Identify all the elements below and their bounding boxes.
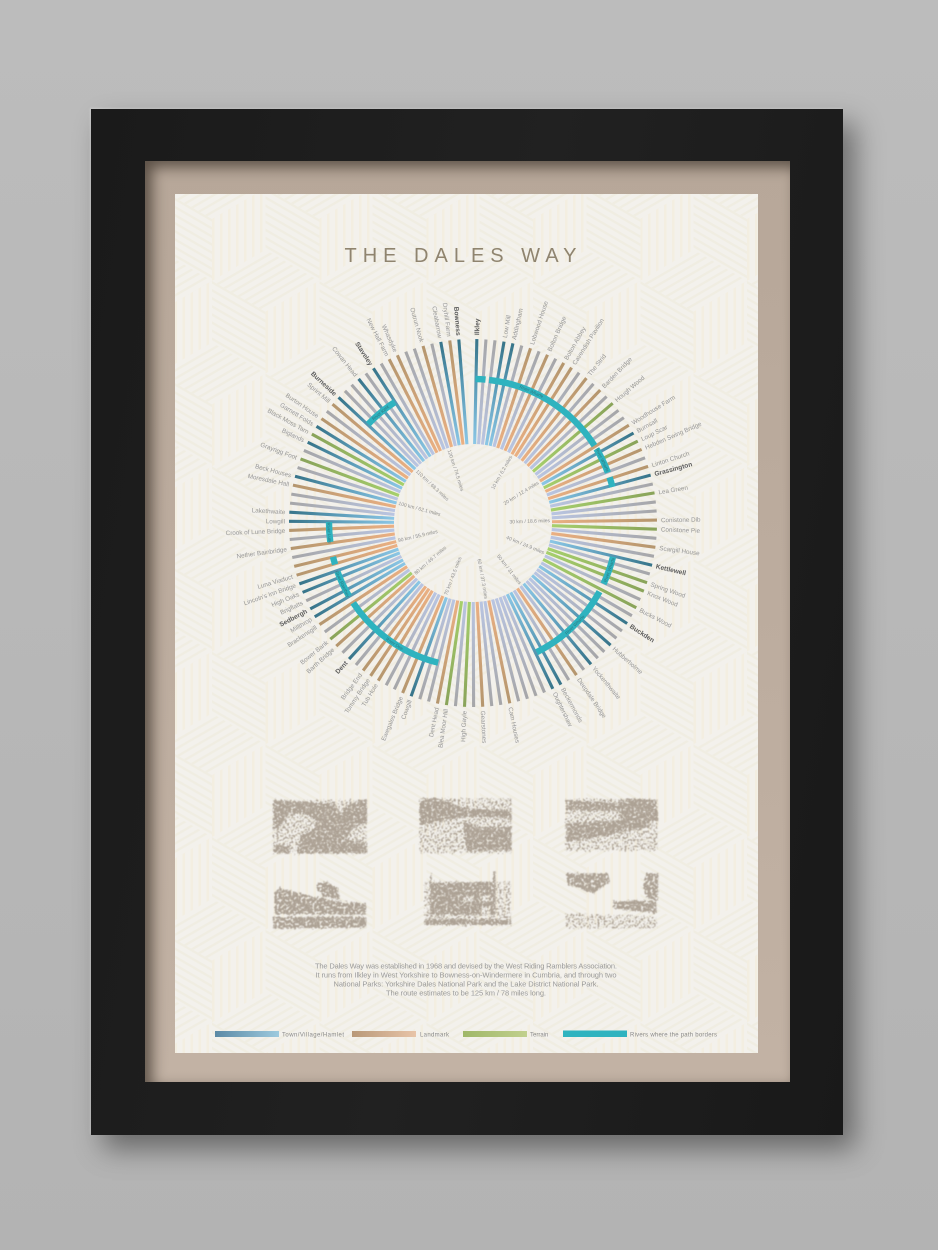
stop labels around the outside of the ring: Bridge End [340,672,364,701]
stop labels around the outside of the ring: Cleabarrow [430,306,443,339]
stop labels around the outside of the ring: Lea Green [658,485,689,496]
stop labels around the outside of the ring: Hebden Swing Bridge [644,421,703,452]
stop labels around the outside of the ring: Black Moss Tarn [266,407,310,436]
stop labels around the outside of the ring: Lincoln's Inn Bridge [243,582,297,607]
stop labels around the outside of the ring: Ilkley [474,318,481,335]
stop labels around the outside of the ring: New Hall Farm [365,317,390,358]
poster [175,194,758,1053]
river names: River Wharfe [603,556,616,583]
stop labels around the outside of the ring: High Gayle [460,710,469,742]
stop labels around the outside of the ring: Grassington [654,461,693,478]
stop labels around the outside of the ring: Low Mill [502,315,513,338]
stop labels around the outside of the ring: Cowgill [400,699,414,721]
stop labels around the outside of the ring: Bucks Wood [638,607,673,630]
stop labels around the outside of the ring: Outrun Nook [408,307,425,344]
stop labels around the outside of the ring: Burneside [309,371,338,398]
stop labels around the outside of the ring: The Strid [587,353,608,378]
stop labels around the outside of the ring: Sprint Mill [306,382,331,405]
engraved photographs [273,798,658,928]
river names: River Rawthey [334,570,351,599]
stop labels around the outside of the ring: Scargill House [659,545,700,557]
distance markers inside the ring: 20 km / 12.4 miles [503,480,541,507]
stop labels around the outside of the ring: Garnett Folds [278,402,315,428]
river names: River Wharfe [594,447,610,473]
stop labels around the outside of the ring: Bower Bank [299,639,331,666]
stop labels around the outside of the ring: Crook of Lune Bridge [226,528,286,537]
stop labels around the outside of the ring [226,300,703,748]
stop labels around the outside of the ring: Dent [334,660,350,676]
stop labels around the outside of the ring: Blea Moor Hill [437,709,450,748]
stop labels around the outside of the ring: Cavendish Pavilion [571,317,606,366]
stop labels around the outside of the ring: Cowan Head [330,345,359,379]
river names: River Wharfe [519,384,545,399]
stop labels around the outside of the ring: Oughtershaw [551,691,574,728]
stop labels around the outside of the ring: Staveley [353,341,374,367]
stop labels around the outside of the ring: Whasdyke [380,324,398,354]
stop labels around the outside of the ring: Yockenthwaite [590,665,622,701]
description paragraph: The Dales Way was established in 1968 and devised by the West Riding Ramblers Association. [315,962,617,970]
river arcs where the path borders water [329,379,613,663]
river names: River Lune [326,522,333,544]
stop labels around the outside of the ring: High Oaks [271,591,300,609]
photo: farmhouse by the river [566,798,658,851]
stop labels around the outside of the ring: Hough Wood [614,374,647,404]
legend item: landmark: Landmark [420,1032,450,1038]
distance markers inside the ring: 70 km / 43.5 miles [443,556,464,596]
description paragraph [315,962,617,998]
stop labels around the outside of the ring: Deepdale Bridge [575,677,608,720]
river names: River Dee [385,636,405,652]
stop labels around the outside of the ring: Lakethwaite [252,507,286,516]
legend item: rivers [563,1030,717,1038]
legend [215,1030,717,1038]
radial bars, one per point on the route [289,339,657,707]
stop labels around the outside of the ring: Cam Houses [506,707,521,744]
legend item: landmark [352,1031,450,1038]
distance markers inside the ring: 60 km / 37.3 miles [476,558,489,600]
stop labels around the outside of the ring: Conistone Dib [661,517,701,524]
stop labels around the outside of the ring: Luna Viaduct [257,574,294,591]
stop labels around the outside of the ring: Barden Bridge [601,356,634,390]
stop labels around the outside of the ring: Sedbergh [279,608,309,629]
stop labels around the outside of the ring: Woodhouse Farm [631,394,677,427]
stop labels around the outside of the ring: Burton House [284,392,320,420]
stop labels around the outside of the ring: Ewegales Bridge [380,695,405,742]
stop labels around the outside of the ring: Buckden [628,623,655,644]
stop labels around the outside of the ring: Millthrop [289,616,314,635]
description paragraph: National Parks: Yorkshire Dales National Park and the Lake District National Park. [334,980,598,988]
title: THE DALES WAY [344,245,576,267]
stop labels around the outside of the ring: Loup Scar [640,424,669,443]
stop labels around the outside of the ring: Addingham [511,308,525,340]
stop labels around the outside of the ring: Brigflatts [279,600,304,617]
stop labels around the outside of the ring: Biglands [281,427,305,444]
stop labels around the outside of the ring: Moresdale Hall [247,473,290,488]
stop labels around the outside of the ring: Bolton Abbey [563,325,588,362]
stop labels around the outside of the ring: Barth Bridge [305,646,336,675]
legend item: terrain [463,1031,548,1038]
stop labels around the outside of the ring: Tommy Bridge [344,677,372,715]
description paragraph: It runs from Ilkley in West Yorkshire to Bowness-on-Windermere in Cumbria, and through two [316,970,616,980]
stop labels around the outside of the ring: Conistone Pie [661,527,701,535]
distance markers inside the ring: 100 km / 62.1 miles [398,501,442,518]
distance markers inside the ring: 120 km / 74.5 miles [446,449,465,493]
distance markers inside the ring: 80 km / 49.7 miles [413,545,448,576]
stop labels around the outside of the ring: Linton Church [651,450,691,469]
distance markers inside the ring: 40 km / 24.9 miles [505,535,545,556]
stop labels around the outside of the ring: Burnsall [636,418,659,435]
stop labels around the outside of the ring: Dent Head [428,706,441,738]
distance markers inside the ring: 90 km / 55.9 miles [397,529,439,544]
stop labels around the outside of the ring: Spring Wood [649,581,687,600]
distance markers inside the ring [397,449,551,600]
stop labels around the outside of the ring: Tub Hole [361,682,380,708]
distance markers inside the ring: 30 km / 18.6 miles [509,518,551,526]
legend item: rivers: Rivers where the path borders [630,1032,717,1038]
description paragraph: The route estimates to be 125 km / 78 miles long. [386,988,546,998]
stop labels around the outside of the ring: Bowness [452,306,461,336]
stop labels around the outside of the ring: Gearstones [479,711,487,743]
stop labels around the outside of the ring: Nether Bainbridge [236,546,288,560]
stop labels around the outside of the ring: Dryhill Farm [441,302,452,337]
river names: River Wharfe [564,614,586,636]
stop labels around the outside of the ring: Lobwood House [529,300,550,346]
circular route chart [226,300,703,748]
stop labels around the outside of the ring: Hubberholme [611,646,644,676]
stop labels around the outside of the ring: Lowgill [266,518,285,525]
distance markers inside the ring: 10 km / 6.2 miles [490,454,514,491]
photo: lake and trees [566,873,658,928]
photo: barn and tree [273,882,367,928]
stop labels around the outside of the ring: Kettlewell [655,563,687,577]
river names [326,384,616,652]
mat board [145,161,790,1082]
stop labels around the outside of the ring: Knox Wood [646,590,679,609]
stop labels around the outside of the ring: Beck Houses [254,463,292,479]
river names: River Kent [371,404,391,421]
photo: village inn [425,872,512,925]
legend item: town, village or hamlet [215,1031,344,1038]
distance markers inside the ring: 110 km / 68.3 miles [414,469,450,503]
photo: hillside and path [420,798,512,853]
stop labels around the outside of the ring: Brackensgill [286,624,319,649]
picture frame [91,109,843,1135]
legend item: town, village or hamlet: Town/Village/Hamlet [282,1032,344,1038]
distance markers inside the ring: 50 km / 31 miles [495,554,522,586]
stop labels around the outside of the ring: Bolton Bridge [547,315,568,353]
photo: stone bridge [273,799,367,853]
legend item: terrain: Terrain [530,1032,548,1038]
stop labels around the outside of the ring: Beckermonds [559,687,584,724]
stop labels around the outside of the ring: Grayrigg Foot [259,442,298,462]
